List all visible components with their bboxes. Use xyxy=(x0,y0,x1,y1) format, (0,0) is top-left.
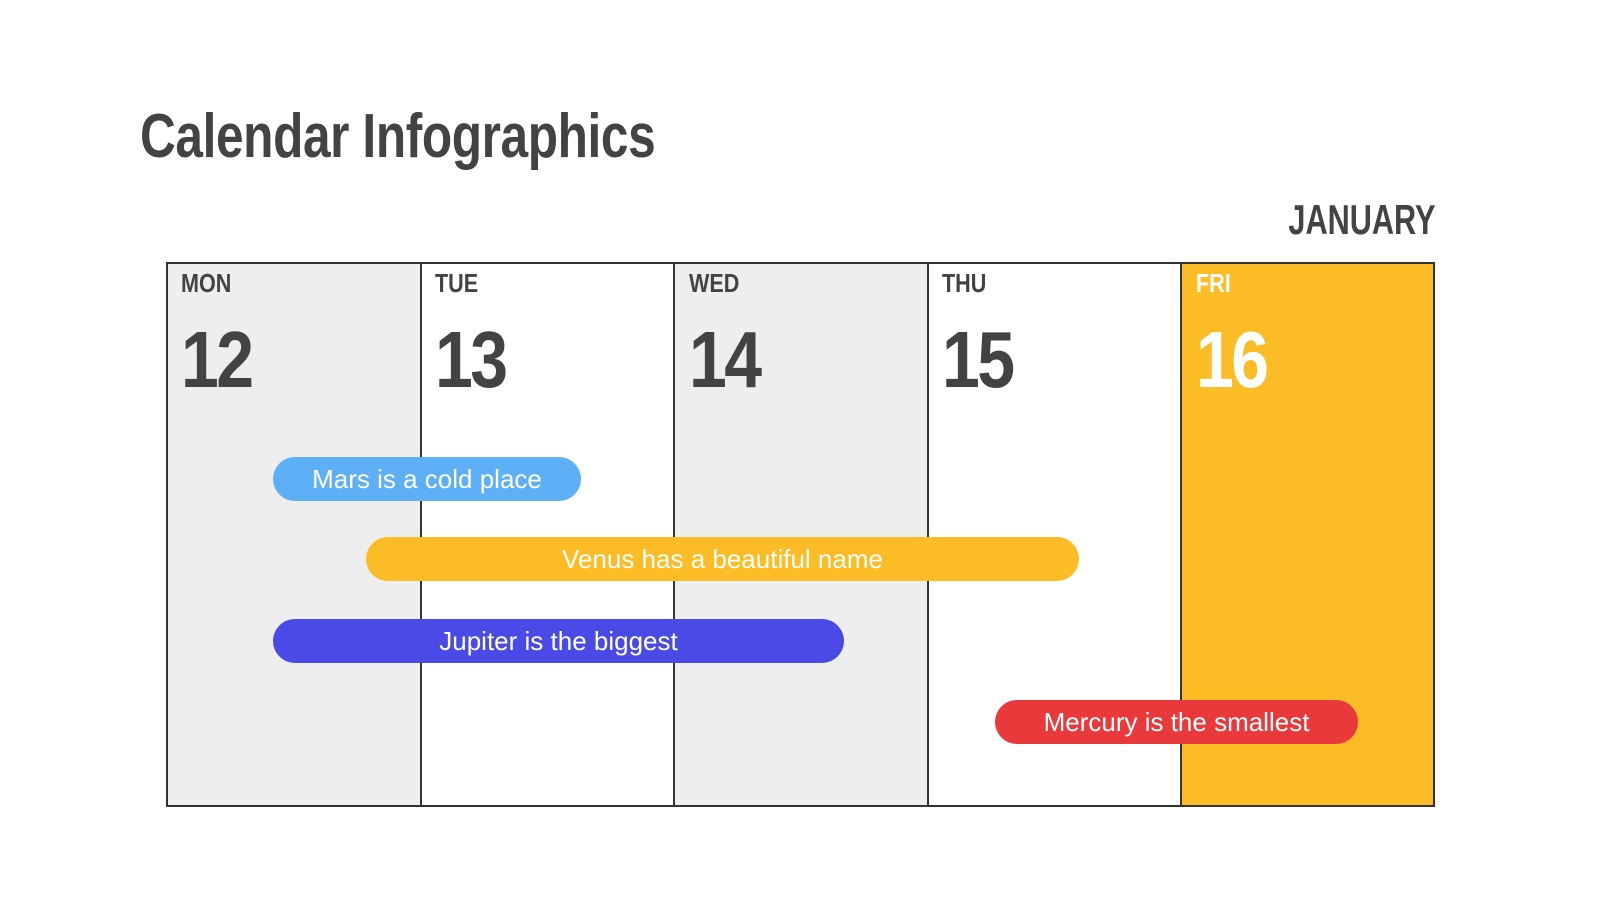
column: friday xyxy=(1181,262,1433,805)
event: Venus: Venus has a beautiful name xyxy=(562,544,883,574)
column: tuesday xyxy=(420,262,674,805)
column: friday: 16 xyxy=(1196,315,1267,404)
column: thursday xyxy=(927,262,1181,805)
column: thursday: THU xyxy=(942,268,986,298)
event: Jupiter xyxy=(273,619,844,663)
column: wednesday xyxy=(674,262,927,805)
column: tuesday: TUE xyxy=(435,268,478,298)
event: Mercury xyxy=(995,700,1358,744)
event: Mars xyxy=(273,457,581,501)
column: monday: 12 xyxy=(181,315,252,404)
column: monday xyxy=(166,262,420,805)
event: Jupiter: Jupiter is the biggest xyxy=(439,626,678,656)
title: Calendar Infographics xyxy=(140,102,655,171)
column: thursday: 15 xyxy=(942,315,1013,404)
column: wednesday: 14 xyxy=(689,315,760,404)
event: Mercury: Mercury is the smallest xyxy=(1044,707,1309,737)
event: Mars: Mars is a cold place xyxy=(312,464,542,494)
column: monday: MON xyxy=(181,268,231,298)
column: tuesday: 13 xyxy=(435,315,506,404)
month label: JANUARY xyxy=(1288,196,1435,243)
column: friday: FRI xyxy=(1196,268,1231,298)
column: wednesday: WED xyxy=(689,268,739,298)
event: Venus xyxy=(366,537,1079,581)
